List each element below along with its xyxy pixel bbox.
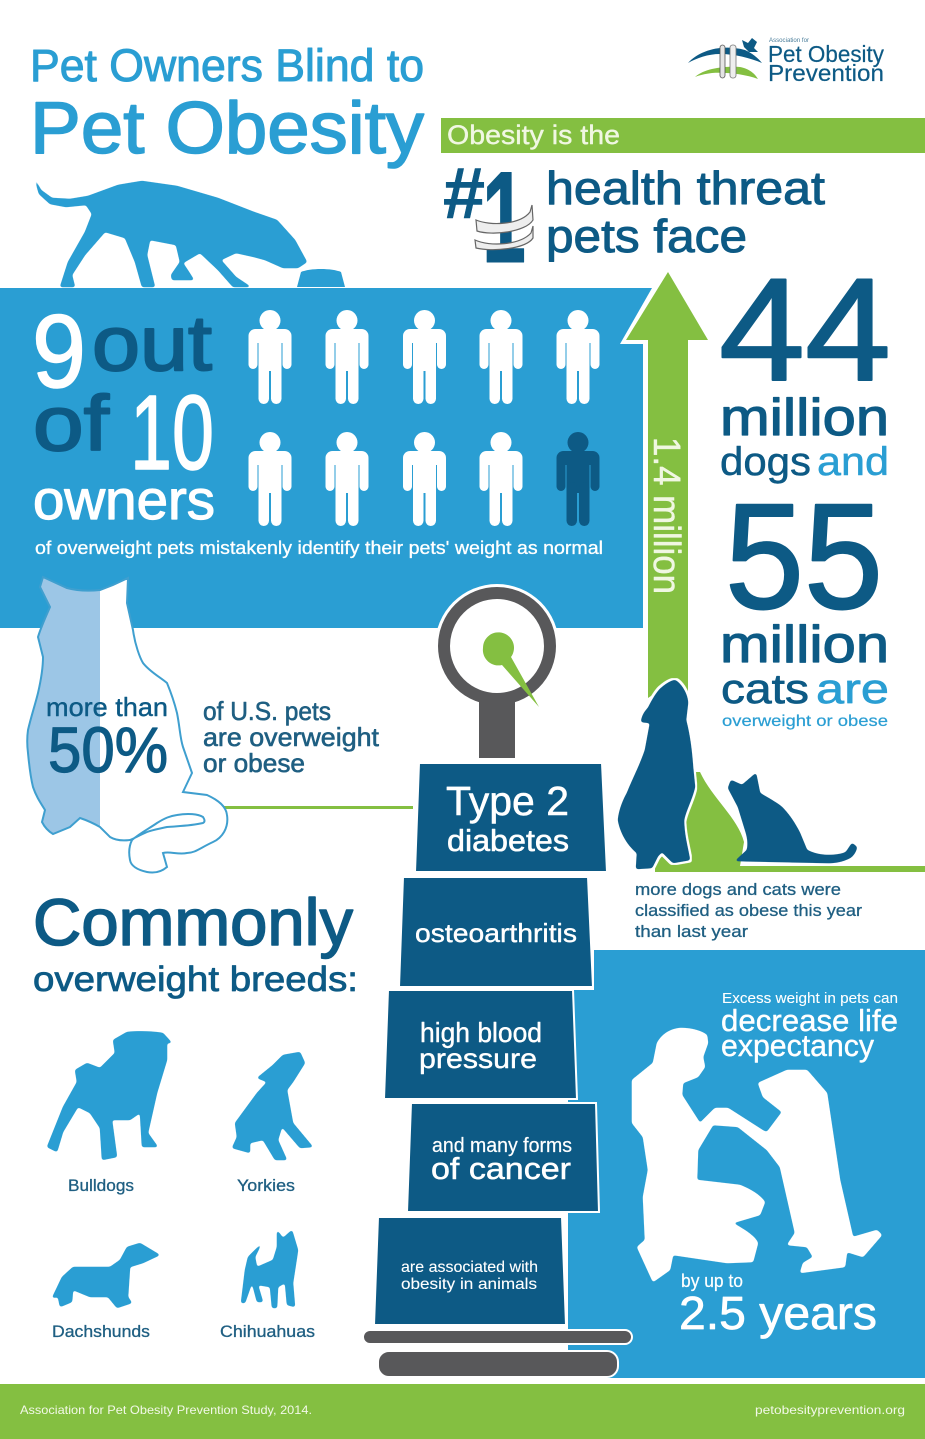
are associated with: are associated with xyxy=(401,1259,538,1276)
logo name line one: Pet Obesity xyxy=(768,41,884,67)
panel: 9 out of 10 owners xyxy=(0,288,652,628)
numeral one: 1 xyxy=(482,144,526,290)
title line one: Pet Owners Blind to xyxy=(30,40,424,91)
pressure: pressure xyxy=(419,1043,537,1074)
gauge ring xyxy=(444,593,550,699)
number 44: 44 xyxy=(719,248,891,411)
2.5 years: 2.5 years xyxy=(679,1287,877,1339)
icon: measuring tape xyxy=(475,205,533,250)
gauge halo xyxy=(435,584,559,708)
osteoarthritis text: osteoarthritis xyxy=(415,918,577,948)
word and: and xyxy=(817,440,889,484)
breed: yorkie xyxy=(232,1052,313,1195)
gauge stem xyxy=(479,695,515,758)
cat silhouette sitting xyxy=(728,773,857,863)
logo name line two: Prevention xyxy=(768,60,884,86)
silhouette: woman with dog xyxy=(632,1028,882,1282)
banner: obesity is the xyxy=(441,118,925,153)
decrease life: decrease life xyxy=(721,1003,898,1038)
footer url: petobesityprevention.org xyxy=(755,1403,905,1417)
panel: decrease life expectancy xyxy=(632,991,898,1339)
label: Bulldogs: Bulldogs xyxy=(68,1176,134,1195)
line two: classified as obese this year xyxy=(635,901,862,920)
expectancy: expectancy xyxy=(721,1028,874,1063)
obesity in animals: obesity in animals xyxy=(401,1276,537,1293)
word cats: cats xyxy=(721,665,809,712)
cat outline xyxy=(27,577,227,872)
arrow label: 1.4 million xyxy=(645,437,687,594)
footer source: Association for Pet Obesity Prevention Study, 2014. xyxy=(20,1403,312,1417)
of cancer: of cancer xyxy=(431,1151,571,1186)
title xyxy=(30,40,425,169)
overweight or obese: overweight or obese xyxy=(722,713,888,730)
green arrow: 1.4 million xyxy=(626,272,925,872)
text: pets face: pets face xyxy=(546,210,747,262)
cat silhouette: more than 50 percent xyxy=(27,577,227,872)
logo: Association for Pet Obesity Prevention xyxy=(688,38,884,86)
dog begging xyxy=(733,1070,882,1273)
breed: bulldog xyxy=(47,1031,172,1195)
upper tape band xyxy=(476,205,533,233)
by up to: by up to xyxy=(681,1271,743,1291)
overweight breeds: overweight breeds: xyxy=(33,960,358,999)
icon: bulldog xyxy=(47,1031,172,1160)
gauge needle xyxy=(483,632,539,707)
caption: of overweight pets mistakenly identify their pets' weight as normal xyxy=(35,538,603,558)
text: health threat: health threat xyxy=(546,162,825,214)
word owners: owners xyxy=(33,468,215,531)
type 2: Type 2 xyxy=(446,778,569,824)
heading: commonly overweight breeds xyxy=(33,885,358,999)
block: many forms of cancer xyxy=(407,1103,599,1212)
block: associated with obesity xyxy=(374,1217,566,1325)
line three: than last year xyxy=(635,922,748,941)
stat: 44 million dogs and 55 million cats xyxy=(719,248,891,730)
banner text: Obesity is the xyxy=(447,120,620,150)
word dogs: dogs xyxy=(720,440,811,484)
line two: are overweight xyxy=(203,722,380,752)
woman xyxy=(632,1028,767,1282)
block: type 2 diabetes xyxy=(415,763,607,872)
scale plate xyxy=(363,1330,632,1344)
panel: life expectancy background xyxy=(568,950,925,1378)
diabetes: diabetes xyxy=(447,823,569,858)
block: osteoarthritis xyxy=(399,877,593,987)
label: Dachshunds: Dachshunds xyxy=(52,1322,150,1341)
logo small line: Association for xyxy=(769,38,809,44)
hash sign: # xyxy=(443,154,485,234)
icon: food bowl xyxy=(297,269,345,287)
scale gauge xyxy=(435,584,559,758)
number 55: 55 xyxy=(725,472,883,640)
text: more dogs and cats were classified xyxy=(635,880,862,941)
dog silhouette sitting xyxy=(618,680,695,869)
cat white fill xyxy=(27,577,227,872)
text: of U.S. pets are overweight or obese xyxy=(203,696,380,778)
breed: dachshund xyxy=(52,1243,160,1341)
big number nine: 9 xyxy=(32,294,86,410)
scale base xyxy=(378,1351,618,1377)
tower of health risks xyxy=(363,763,632,1377)
label: Yorkies: Yorkies xyxy=(237,1176,295,1195)
label: Chihuahuas: Chihuahuas xyxy=(220,1322,315,1341)
breed: chihuahua xyxy=(220,1230,315,1341)
word are: are xyxy=(816,665,889,712)
pictogram: ten people xyxy=(248,310,600,526)
arrow shape xyxy=(626,272,925,872)
cat shaded half xyxy=(27,577,100,834)
line three: or obese xyxy=(203,748,305,778)
dog eating silhouette xyxy=(34,177,307,287)
and many forms: and many forms xyxy=(432,1135,572,1157)
word of: of xyxy=(33,379,109,467)
footer bar xyxy=(0,1384,925,1439)
high blood: high blood xyxy=(420,1017,542,1048)
icon: chihuahua xyxy=(241,1230,298,1308)
connector line from cat to tower xyxy=(222,806,413,809)
word million again: million xyxy=(720,616,889,674)
intro text: Excess weight in pets can xyxy=(722,991,898,1007)
commonly: Commonly xyxy=(33,885,353,959)
lower tape band xyxy=(475,226,533,250)
logo mark xyxy=(688,38,762,79)
number one health threat xyxy=(443,144,825,290)
text: more than: more than xyxy=(46,692,168,722)
line one: more dogs and cats were xyxy=(635,880,841,899)
icon: yorkie xyxy=(232,1052,313,1160)
number ten: 10 xyxy=(130,374,214,492)
title line two: Pet Obesity xyxy=(30,88,425,169)
word million: million xyxy=(720,389,889,447)
block: high blood pressure xyxy=(384,990,577,1099)
word out: out xyxy=(92,299,212,387)
line one: of U.S. pets xyxy=(203,696,331,726)
panel background xyxy=(0,288,652,628)
icon: dachshund xyxy=(52,1243,160,1308)
text: 50 percent: 50% xyxy=(48,714,168,786)
